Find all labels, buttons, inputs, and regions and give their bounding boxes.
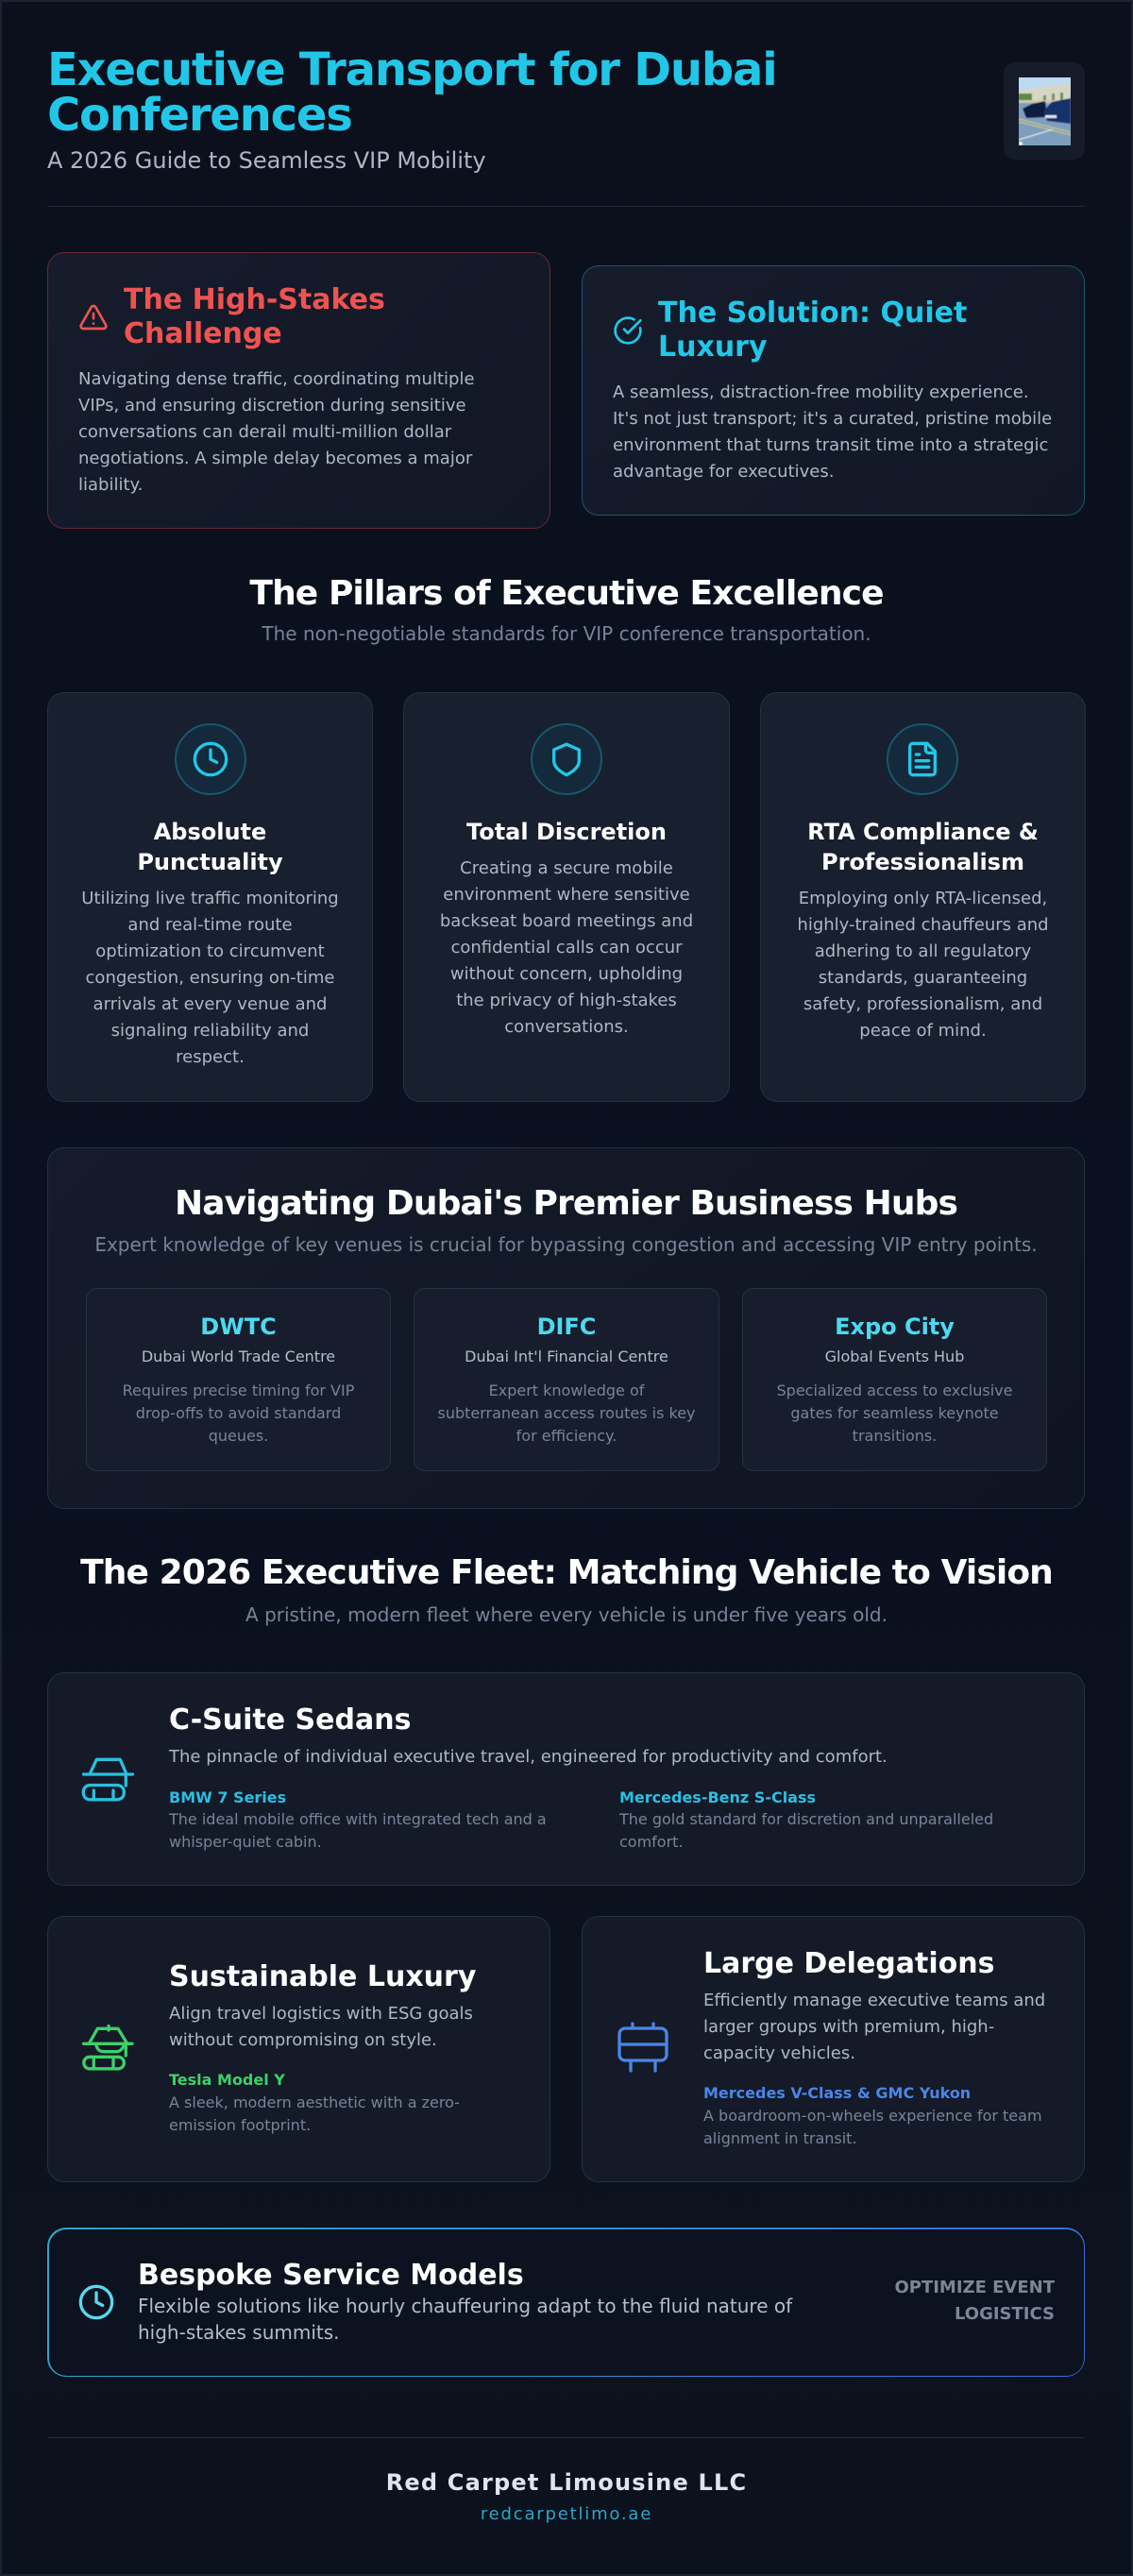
pillar heading <box>807 819 1039 875</box>
sustainable text: without compromising on style. <box>169 2030 437 2050</box>
title: Executive Transport for Dubai <box>47 43 776 96</box>
hubs subheading: Expert knowledge of key venues is crucial for bypassing congestion and accessing VIP entry points. <box>94 1233 1038 1256</box>
panel: total discretion <box>403 692 730 1102</box>
pillar heading: Total Discretion <box>466 819 667 845</box>
pillar text: safety, professionalism, and <box>803 994 1042 1014</box>
vehicle text: The gold standard for discretion and unparalleled <box>619 1810 993 1828</box>
pillar text: standards, guaranteeing <box>819 968 1027 988</box>
pillar text: and real-time route <box>127 915 293 935</box>
vehicle text: A sleek, modern aesthetic with a zero- <box>169 2093 460 2111</box>
hub text: drop-offs to avoid standard <box>136 1404 341 1422</box>
challenge text: liability. <box>78 475 143 495</box>
thumbnail frame <box>1004 62 1085 160</box>
icon: sedan <box>81 1758 134 1802</box>
vehicle: Tesla Model Y <box>169 2071 460 2134</box>
vehicle name: Tesla Model Y <box>169 2071 285 2089</box>
challenge heading: The High-Stakes <box>124 283 385 316</box>
subheading: fleet: A pristine, modern fleet where every vehicle is under five years old. <box>245 1603 888 1626</box>
solution text: environment that turns transit time into a strategic <box>613 435 1048 455</box>
vehicle name: Mercedes V-Class & GMC Yukon <box>703 2084 971 2102</box>
header <box>47 43 1085 174</box>
icon: electric car <box>81 2025 134 2070</box>
hub text: for efficiency. <box>516 1427 617 1445</box>
hub card: Expo City <box>742 1288 1047 1471</box>
hub name: DWTC <box>200 1313 277 1340</box>
challenge text: negotiations. A simple delay becomes a major <box>78 449 472 468</box>
sustainable text: Align travel logistics with ESG goals <box>169 2004 473 2024</box>
hub card: DWTC <box>86 1288 391 1471</box>
vehicle: V-Class and Yukon <box>703 2084 1042 2147</box>
pillar text: arrivals at every venue and <box>93 994 327 1014</box>
bespoke text: Flexible solutions like hourly chauffeuring adapt to the fluid nature of <box>138 2295 792 2317</box>
solution text: It's not just transport; it's a curated, pristine mobile <box>613 409 1052 429</box>
call to action: OPTIMIZE EVENT <box>894 2278 1055 2297</box>
pillar text: congestion, ensuring on-time <box>86 968 334 988</box>
title <box>47 43 776 142</box>
hub card: DIFC <box>414 1288 719 1471</box>
delegations text: larger groups with premium, high- <box>703 2017 994 2037</box>
pillar heading: Punctuality <box>137 849 283 875</box>
solution heading: The Solution: Quiet <box>658 297 967 330</box>
company name: Red Carpet Limousine LLC <box>386 2469 747 2496</box>
hub text: Requires precise timing for VIP <box>123 1381 354 1399</box>
pillar heading: RTA Compliance & <box>807 819 1039 845</box>
pillar text: respect. <box>176 1047 245 1067</box>
website: redcarpetlimo.ae <box>481 2504 652 2524</box>
panel: absolute punctuality <box>47 692 373 1102</box>
solution text <box>613 382 1052 482</box>
bespoke text <box>138 2295 793 2344</box>
icon: shield <box>531 723 602 795</box>
heading: pillars: The Pillars of Executive Excellence <box>249 574 884 613</box>
subtitle: A 2026 Guide to Seamless VIP Mobility <box>47 147 486 174</box>
solution heading <box>658 297 967 364</box>
call to action: LOGISTICS <box>955 2304 1055 2324</box>
pillar text: backseat board meetings and <box>440 911 693 931</box>
challenge text <box>78 369 475 495</box>
panel: large delegations <box>582 1916 1085 2182</box>
hub full name: Global Events Hub <box>825 1347 964 1365</box>
icon: clock <box>79 2285 113 2319</box>
pillar text: Utilizing live traffic monitoring <box>81 889 339 908</box>
challenge heading <box>124 283 385 350</box>
vehicle text: The ideal mobile office with integrated tech and a <box>169 1810 547 1828</box>
pillar heading: Professionalism <box>821 849 1024 875</box>
hub text: queues. <box>209 1427 268 1445</box>
hub text: Expert knowledge of <box>489 1381 644 1399</box>
hubs heading: Navigating Dubai's Premier Business Hubs <box>175 1184 957 1223</box>
vehicle text: comfort. <box>619 1833 684 1851</box>
hub name: DIFC <box>537 1313 596 1340</box>
panel: solution <box>582 265 1085 516</box>
challenge text: VIPs, and ensuring discretion during sensitive <box>78 396 466 415</box>
bespoke text: high-stakes summits. <box>138 2321 340 2344</box>
vehicle: BMW 7 Series <box>168 1788 547 1851</box>
vehicle text: whisper-quiet cabin. <box>169 1833 322 1851</box>
vehicle name: BMW 7 Series <box>169 1788 286 1806</box>
icon: check circle <box>614 316 642 345</box>
hub text <box>123 1381 354 1445</box>
delegations text <box>703 1991 1045 2063</box>
pillar text: confidential calls can occur <box>450 938 683 958</box>
sustainable heading: Sustainable Luxury <box>169 1960 476 1993</box>
icon: document <box>887 723 958 795</box>
hub full name: Dubai Int'l Financial Centre <box>465 1347 668 1365</box>
challenge text: Navigating dense traffic, coordinating multiple <box>78 369 475 389</box>
c-suite text: The pinnacle of individual executive travel, engineered for productivity and comfort. <box>169 1747 888 1767</box>
delegations text: Efficiently manage executive teams and <box>703 1991 1045 2010</box>
hub text: subterranean access routes is key <box>437 1404 695 1422</box>
challenge heading: Challenge <box>124 317 282 350</box>
pillar text: conversations. <box>504 1017 629 1037</box>
hub name: Expo City <box>835 1313 955 1340</box>
panel: c-suite sedans <box>47 1672 1085 1886</box>
vehicle text <box>168 1810 547 1851</box>
vehicle text <box>169 2093 460 2134</box>
pillar heading <box>137 819 283 875</box>
pillar text: peace of mind. <box>859 1021 987 1041</box>
hub text <box>777 1381 1012 1445</box>
bespoke heading: Bespoke Service Models <box>138 2259 524 2292</box>
vehicle: Mercedes-Benz S-Class <box>619 1788 993 1851</box>
vehicle text <box>619 1810 993 1851</box>
icon: van <box>617 2022 668 2073</box>
icon: clock <box>175 723 246 795</box>
panel: rta compliance <box>760 692 1086 1102</box>
c-suite heading: C-Suite Sedans <box>169 1703 411 1737</box>
pillar text: environment where sensitive <box>443 885 690 905</box>
vehicle text <box>703 2107 1042 2147</box>
hub text: gates for seamless keynote <box>790 1404 999 1422</box>
hub full name: Dubai World Trade Centre <box>142 1347 335 1365</box>
pillar text <box>797 889 1049 1041</box>
vehicle name: Mercedes-Benz S-Class <box>619 1788 816 1806</box>
call to action <box>894 2278 1055 2324</box>
panel: sustainable luxury <box>47 1916 550 2182</box>
title: Conferences <box>47 89 352 142</box>
sustainable text <box>169 2004 473 2050</box>
delegations heading: Large Delegations <box>703 1947 994 1980</box>
vehicle text: emission footprint. <box>169 2116 311 2134</box>
pillar text <box>81 889 339 1067</box>
pillar text: the privacy of high-stakes <box>456 991 677 1010</box>
challenge text: conversations can derail multi-million dollar <box>78 422 451 442</box>
pillar text <box>440 858 693 1037</box>
thumbnail: cars in front of building <box>1019 77 1071 145</box>
solution heading: Luxury <box>658 330 768 364</box>
delegations text: capacity vehicles. <box>703 2043 855 2063</box>
pillar text: without concern, upholding <box>450 964 683 984</box>
pillar text: signaling reliability and <box>111 1021 309 1041</box>
pillar text: optimization to circumvent <box>95 941 325 961</box>
pillar text: highly-trained chauffeurs and <box>797 915 1049 935</box>
footer <box>386 2469 747 2524</box>
pillar text: Creating a secure mobile <box>460 858 673 878</box>
subheading: pillars: The non-negotiable standards for VIP conference transportation. <box>262 622 871 645</box>
panel: business hubs <box>47 1147 1085 1509</box>
icon: warning triangle <box>79 304 108 330</box>
pillar heading: Absolute <box>154 819 266 845</box>
panel: bespoke service models <box>47 2228 1085 2377</box>
heading: fleet: The 2026 Executive Fleet: Matching Vehicle to Vision <box>80 1553 1053 1592</box>
panel: challenge <box>47 252 550 529</box>
hub text: transitions. <box>853 1427 937 1445</box>
solution text: advantage for executives. <box>613 462 834 482</box>
hub text: Specialized access to exclusive <box>777 1381 1012 1399</box>
solution text: A seamless, distraction-free mobility experience. <box>613 382 1029 402</box>
vehicle text: alignment in transit. <box>703 2129 857 2147</box>
vehicle text: A boardroom-on-wheels experience for team <box>703 2107 1042 2125</box>
hub text <box>437 1381 695 1445</box>
pillar text: adhering to all regulatory <box>815 941 1031 961</box>
pillar text: Employing only RTA-licensed, <box>799 889 1047 908</box>
